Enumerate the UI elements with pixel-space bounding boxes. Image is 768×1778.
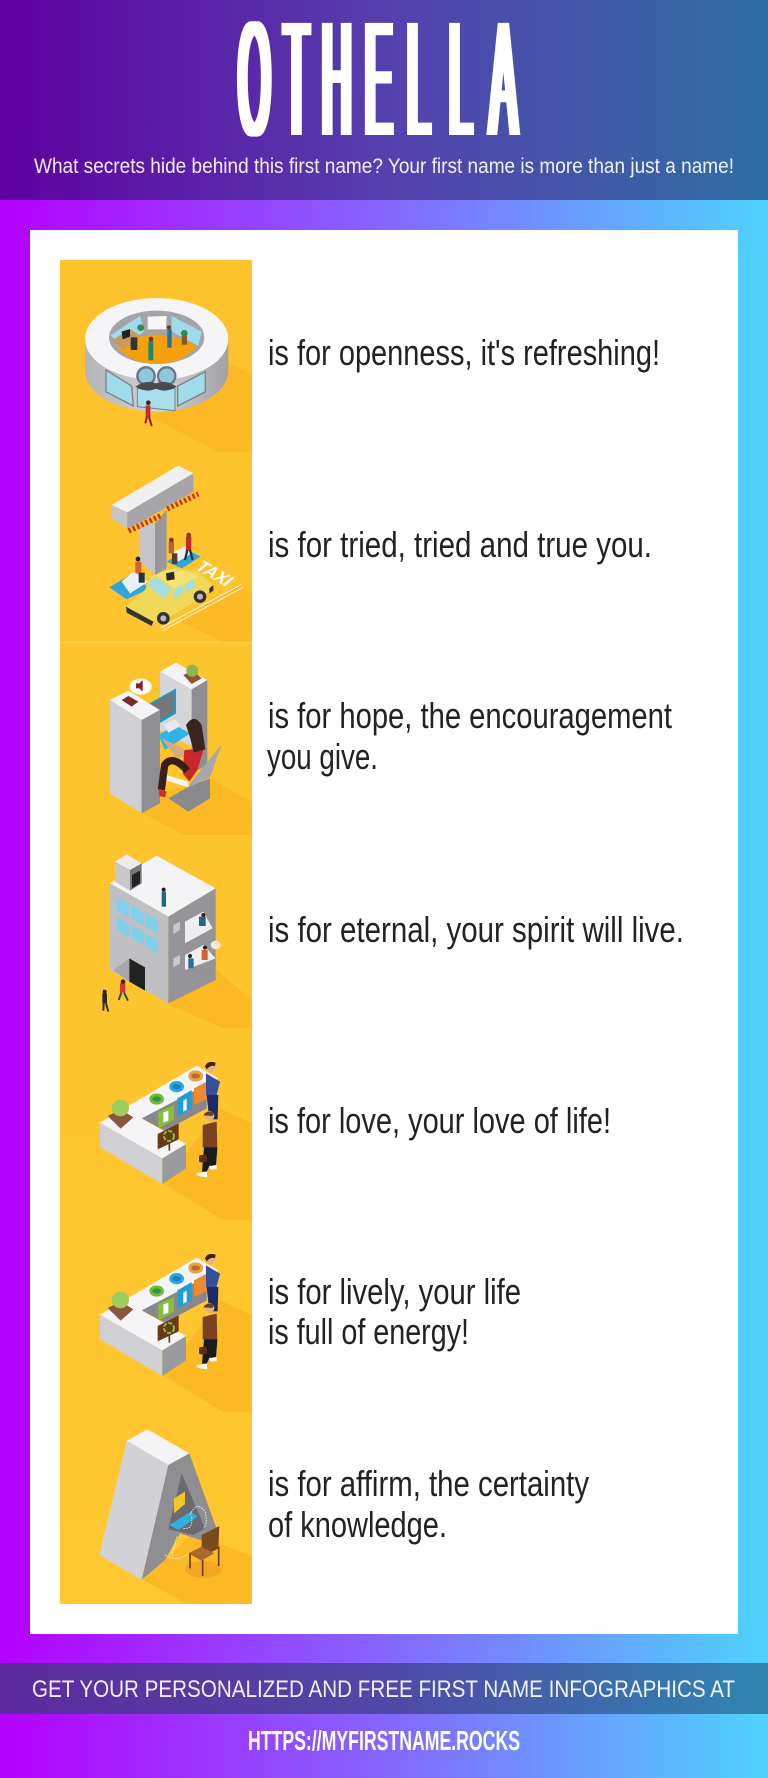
panel: header band [0, 0, 768, 200]
text: A lines: is for affirm, the certainty [268, 1463, 589, 1504]
icon: letter A with chair [99, 1429, 252, 1604]
text: second L lines: is for lively, your life [268, 1271, 521, 1312]
taxi lettering: TAXI [191, 558, 238, 589]
icon: letter E office building [102, 854, 252, 1028]
icon: letter L recycling counter [100, 1062, 252, 1220]
text: second L lines [268, 1271, 521, 1352]
text: H lines: you give. [267, 736, 378, 777]
panel: footer band [0, 1663, 768, 1714]
icon: letter H desk with woman [110, 663, 252, 835]
text: H lines: is for hope, the encouragement [268, 695, 672, 736]
icon: second letter L recycling counter [100, 1254, 252, 1412]
icon: letter O optician building [85, 298, 252, 452]
text: second L lines: is full of energy! [268, 1311, 469, 1352]
footer url: HTTPS://MYFIRSTNAME.ROCKS [248, 1725, 520, 1756]
text: A lines [268, 1463, 589, 1545]
panel: white card [30, 230, 738, 1634]
text: T line: is for tried, tried and true you. [268, 524, 652, 565]
text: A lines: of knowledge. [268, 1504, 447, 1545]
icon: letter T taxi stand [109, 466, 252, 642]
text: E line: is for eternal, your spirit will live. [268, 909, 684, 950]
panel: yellow illustration column [60, 260, 252, 1604]
text: H lines [267, 695, 672, 777]
text: O line: is for openness, it's refreshing! [268, 332, 660, 373]
text: L line: is for love, your love of life! [268, 1100, 611, 1141]
